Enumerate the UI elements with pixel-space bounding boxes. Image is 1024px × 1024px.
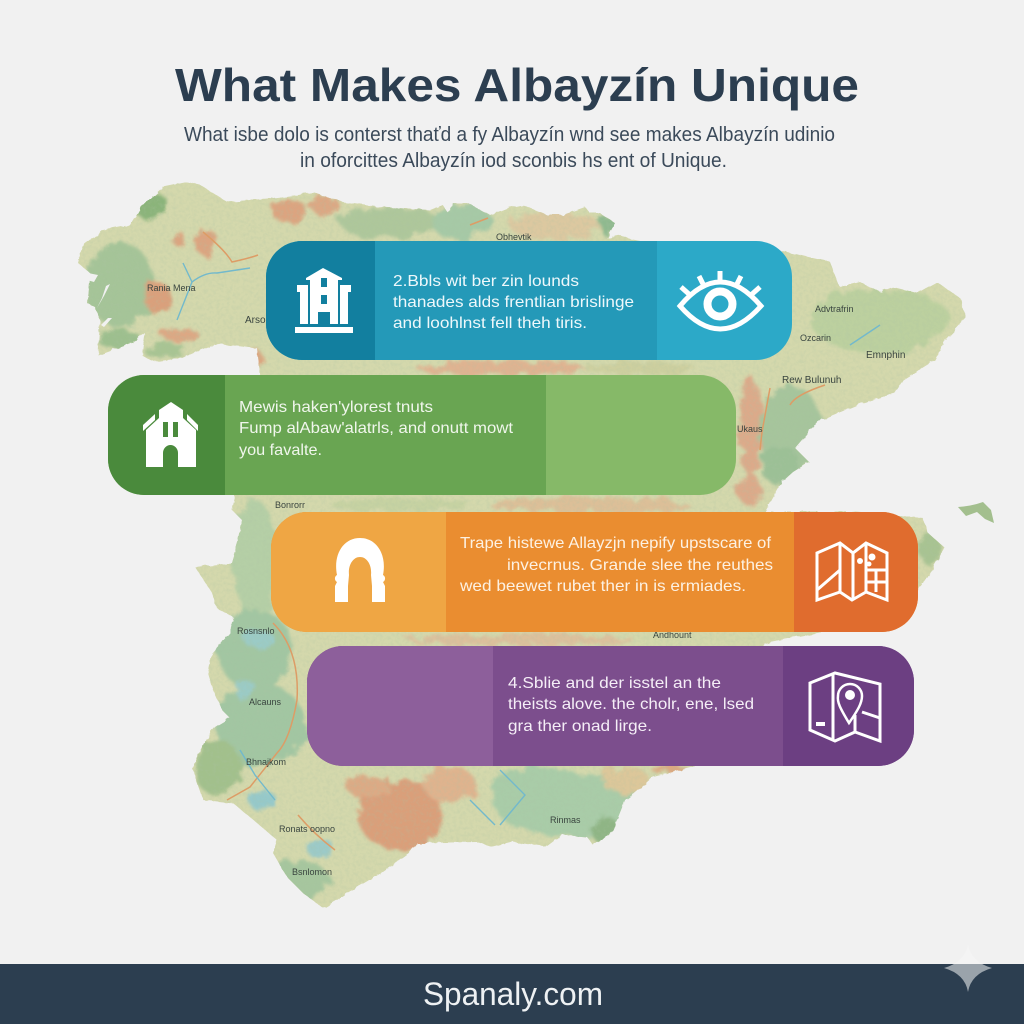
icon: eye (680, 271, 761, 329)
text block: green card: Fump alAbaw'alatrls, and onutt mowt (239, 420, 514, 437)
footer text: Spanaly.com (423, 976, 603, 1012)
text block: purple card (508, 675, 754, 735)
map place labels: Bonrorr (275, 500, 305, 510)
text block: orange card: wed beewet rubet ther in is ermiades. (459, 578, 746, 595)
text block: blue card: thanades alds frentlian brislinge (393, 294, 634, 311)
map place labels: Rania Mena (147, 283, 196, 293)
map place labels: Andhount (653, 630, 692, 640)
map place labels: Ukaus (737, 424, 763, 434)
map place labels: Obhevtik (496, 232, 532, 242)
text block: green card (239, 399, 514, 459)
icon: folded map (817, 543, 887, 600)
icon: horseshoe arch (335, 538, 385, 602)
map place labels: Rew Bulunuh (782, 375, 841, 386)
title: What Makes Albayzín Unique (175, 59, 859, 111)
panel: purple card (307, 646, 914, 766)
text block: blue card: and loohlnst fell theh tiris. (393, 315, 587, 332)
coastal inlets (87, 273, 112, 327)
text block: purple card: gra ther onad lirge. (508, 718, 652, 735)
map place labels: Alcauns (249, 697, 282, 707)
map place labels: Arso (245, 315, 266, 326)
text block: blue card (393, 273, 634, 332)
text block: purple card: theists alove. the cholr, ene, lsed (508, 696, 754, 713)
map place labels: Ronats oopno (279, 824, 335, 834)
footer bar (0, 964, 1024, 1024)
subtitle (184, 124, 835, 172)
icon: four-point star (944, 944, 992, 992)
map place labels (147, 232, 905, 877)
text block: blue card: 2.Bbls wit ber zin lounds (393, 273, 579, 290)
panel: blue card (266, 241, 792, 360)
map place labels: Advtrafrin (815, 304, 854, 314)
text block: orange card: Trape histewe Allayzjn nepify upstscare of (460, 535, 772, 552)
panel: green card (108, 375, 736, 495)
map place labels: Emnphin (866, 350, 905, 361)
text block: orange card: invecrnus. Grande slee the reuthes (507, 557, 773, 574)
subtitle: in oforcittes Albayzín iod sconbis hs ent of Unique. (300, 150, 727, 172)
text block: green card: you favalte. (239, 442, 322, 459)
subtitle: What isbe dolo is conterst thaťd a fy Albayzín wnd see makes Albayzín udinio (184, 124, 835, 146)
map place labels: Rosnsnlo (237, 626, 275, 636)
map place labels: Rinmas (550, 815, 581, 825)
map place labels: Bsnlomon (292, 867, 332, 877)
icon: house with arch door (143, 402, 198, 467)
map place labels: Bhnajkom (246, 757, 286, 767)
panel: orange card (271, 512, 918, 632)
icon: map with location pin (810, 673, 880, 741)
text block: purple card: 4.Sblie and der isstel an the (508, 675, 721, 692)
Balearic island (958, 502, 994, 523)
text block: green card: Mewis haken'ylorest tnuts (239, 399, 433, 416)
icon: columned building (295, 268, 353, 333)
map place labels: Ozcarin (800, 333, 831, 343)
map of the Iberian peninsula (60, 170, 994, 920)
text block: orange card (459, 535, 773, 595)
